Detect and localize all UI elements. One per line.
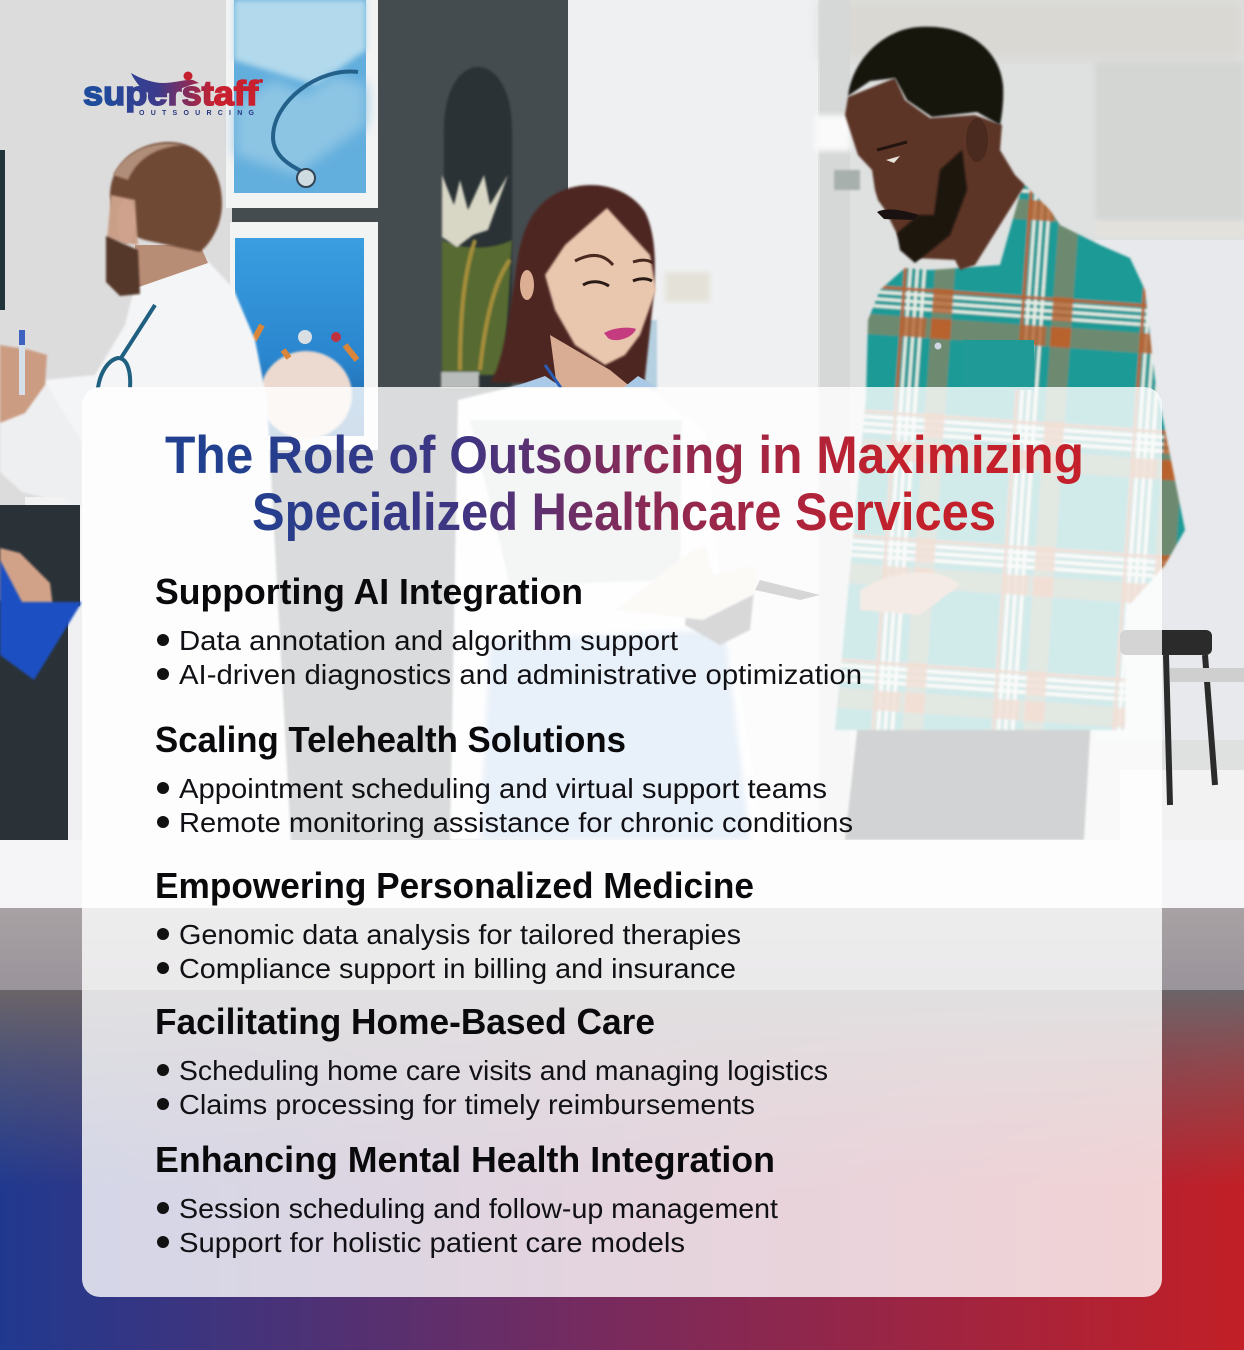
background lower bands <box>0 840 1244 1350</box>
doctor left <box>0 142 292 860</box>
man: head <box>845 78 1025 270</box>
section: Enhancing Mental Health Integration <box>155 1139 778 1258</box>
section: Facilitating Home-Based Care <box>155 1001 828 1120</box>
section: Enhancing Mental Health Integration: Support for holistic patient care models <box>179 1227 685 1258</box>
upper framed art <box>226 0 378 208</box>
section: Enhancing Mental Health Integration: Enhancing Mental Health Integration <box>155 1139 775 1180</box>
section: Empowering Personalized Medicine <box>155 865 754 984</box>
stool <box>1120 630 1244 805</box>
section: Empowering Personalized Medicine: Compliance support in billing and insurance <box>179 953 736 984</box>
section: Scaling Telehealth Solutions: Scaling Telehealth Solutions <box>155 719 626 760</box>
section: Enhancing Mental Health Integration: Session scheduling and follow-up management <box>179 1193 778 1224</box>
section: Empowering Personalized Medicine: Empowering Personalized Medicine <box>155 865 754 906</box>
section: Supporting AI Integration: Supporting AI Integration <box>155 571 583 612</box>
section: Facilitating Home-Based Care: Facilitating Home-Based Care <box>155 1001 655 1042</box>
translucent content panel <box>82 387 1162 1297</box>
dark column <box>232 0 568 840</box>
title: Specialized Healthcare Services <box>252 483 996 542</box>
man: plaid shirt <box>835 183 1185 730</box>
nurse <box>450 185 820 840</box>
section: Scaling Telehealth Solutions <box>155 719 853 838</box>
title: The Role of Outsourcing in Maximizing <box>165 426 1084 485</box>
counter and clipboard <box>0 497 82 840</box>
plant <box>441 175 512 388</box>
section: Facilitating Home-Based Care: Claims processing for timely reimbursements <box>179 1089 755 1120</box>
section: Supporting AI Integration: Data annotation and algorithm support <box>179 625 678 656</box>
section: Scaling Telehealth Solutions: Appointment scheduling and virtual support teams <box>179 773 827 804</box>
lower framed art <box>230 222 378 450</box>
section: Supporting AI Integration: AI-driven diagnostics and administrative optimization <box>179 659 862 690</box>
section: Empowering Personalized Medicine: Genomic data analysis for tailored therapies <box>179 919 741 950</box>
man: lower body <box>845 699 1092 840</box>
section: Facilitating Home-Based Care: Scheduling home care visits and managing logistics <box>179 1055 828 1086</box>
section: Supporting AI Integration <box>155 571 862 690</box>
logo: Superstaff Outsourcing: OUTSOURCING <box>139 110 255 117</box>
section: Scaling Telehealth Solutions: Remote monitoring assistance for chronic conditions <box>179 807 853 838</box>
walls <box>0 0 1244 840</box>
logo: Superstaff Outsourcing: superstaff <box>83 75 259 113</box>
title <box>165 426 1084 542</box>
background photo: clinic scene <box>0 0 1244 860</box>
